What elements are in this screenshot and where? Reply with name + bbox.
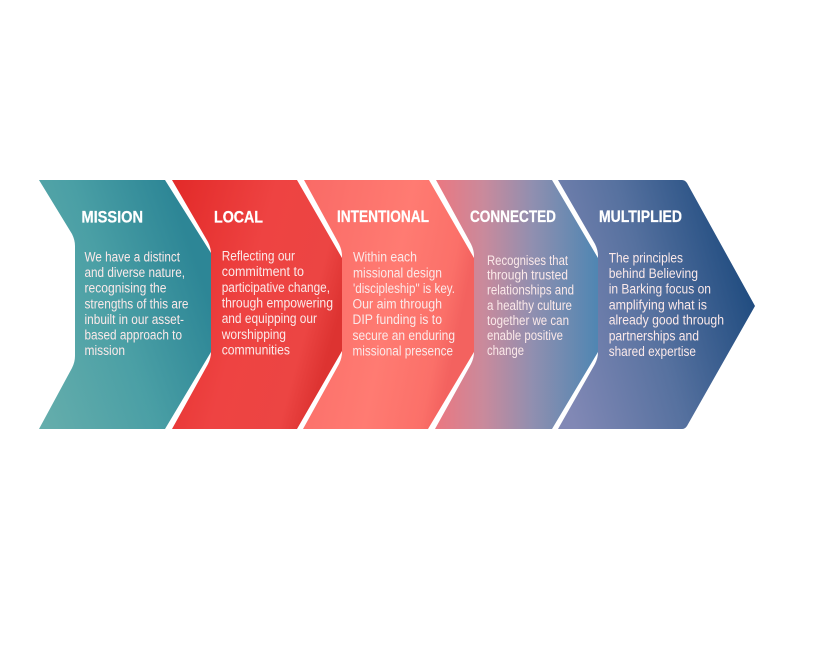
text: mission description: strengths of this are <box>84 296 188 312</box>
text: local description: and equipping our <box>222 311 317 326</box>
text: local description: communities <box>222 342 290 358</box>
text: connected description: through trusted <box>487 268 568 282</box>
text: local description: Reflecting our <box>222 248 295 264</box>
text: intentional description: Our aim through <box>352 296 442 312</box>
text: mission description <box>84 250 188 358</box>
text: multiplied description: shared expertise <box>609 344 696 359</box>
panel: intentional <box>303 180 474 429</box>
text: connected description: Recognises that <box>487 253 568 268</box>
text: mission description: based approach to <box>84 328 182 342</box>
heading: local: LOCAL <box>214 208 263 226</box>
text: intentional description: 'discipleship" is key. <box>353 281 455 296</box>
text: multiplied description: The principles <box>609 250 683 266</box>
heading: multiplied: MULTIPLIED <box>599 208 682 226</box>
text: local description: commitment to <box>222 264 304 279</box>
heading: mission: MISSION <box>82 208 143 226</box>
text: connected description: change <box>487 343 524 358</box>
text: mission description: We have a distinct <box>84 250 180 264</box>
text: local description: worshipping <box>221 327 286 342</box>
text: local description: participative change, <box>222 280 330 295</box>
panel: mission <box>39 180 211 429</box>
heading: intentional: INTENTIONAL <box>337 208 429 226</box>
text: mission description: recognising the <box>84 280 166 296</box>
panel: multiplied <box>558 180 755 429</box>
text: connected description <box>487 253 574 358</box>
panel: connected <box>435 180 598 429</box>
text: multiplied description: partnerships and <box>609 328 699 344</box>
heading: connected: CONNECTED <box>470 208 556 226</box>
text: intentional description: Within each <box>353 250 417 264</box>
text: local description: through empowering <box>222 296 333 310</box>
text: intentional description <box>352 250 455 358</box>
text: intentional description: missional presence <box>352 344 453 358</box>
text: local description <box>221 248 333 358</box>
text: mission description: inbuilt in our asset- <box>84 312 184 327</box>
text: connected description: a healthy culture <box>487 298 572 313</box>
text: intentional description: DIP funding is to <box>352 312 442 327</box>
text: intentional description: secure an enduring <box>352 328 455 343</box>
text: multiplied description: already good through <box>609 312 724 328</box>
text: connected description: together we can <box>487 313 569 328</box>
text: multiplied description: behind Believing <box>609 266 698 281</box>
text: mission description: and diverse nature, <box>84 265 185 280</box>
text: multiplied description: amplifying what is <box>609 298 707 312</box>
text: multiplied description <box>609 250 724 359</box>
text: connected description: enable positive <box>487 328 563 343</box>
text: mission description: mission <box>84 343 125 358</box>
text: intentional description: missional design <box>353 266 442 280</box>
text: connected description: relationships and <box>487 282 574 298</box>
panel: local <box>172 180 342 429</box>
text: multiplied description: in Barking focus on <box>609 282 711 296</box>
